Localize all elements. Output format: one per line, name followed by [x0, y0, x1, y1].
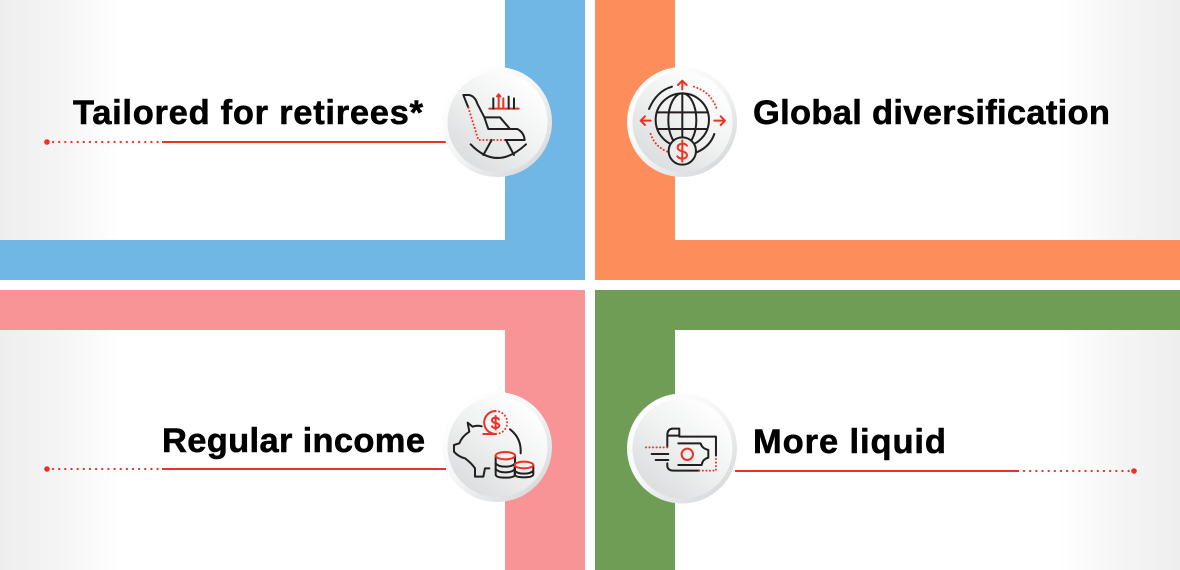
- connector line: regular income: [44, 466, 446, 472]
- green corner band: [595, 290, 1180, 570]
- heading: regular income: Regular income: [162, 422, 425, 460]
- heading: global diversification: Global diversification: [753, 94, 1110, 132]
- panel: regular income: [0, 290, 585, 570]
- icon: rocking chair badge: [442, 67, 552, 177]
- panel: tailored for retirees: [0, 0, 585, 280]
- icon: piggy bank with coins badge: [442, 392, 552, 502]
- heading: more liquid: More liquid: [753, 423, 946, 461]
- heading: tailored for retirees: Tailored for retirees*: [73, 94, 424, 132]
- connector line: more liquid: [735, 468, 1137, 474]
- panel: global diversification: [595, 0, 1180, 280]
- icon: flying banknote badge: [627, 394, 737, 504]
- orange corner band: [595, 0, 1180, 280]
- connector line: tailored for retirees: [44, 139, 446, 145]
- panel: more liquid: [595, 290, 1180, 570]
- icon: globe with dollar and arrows badge: [627, 67, 737, 177]
- pink corner band: [0, 290, 585, 570]
- blue corner band: [0, 0, 585, 280]
